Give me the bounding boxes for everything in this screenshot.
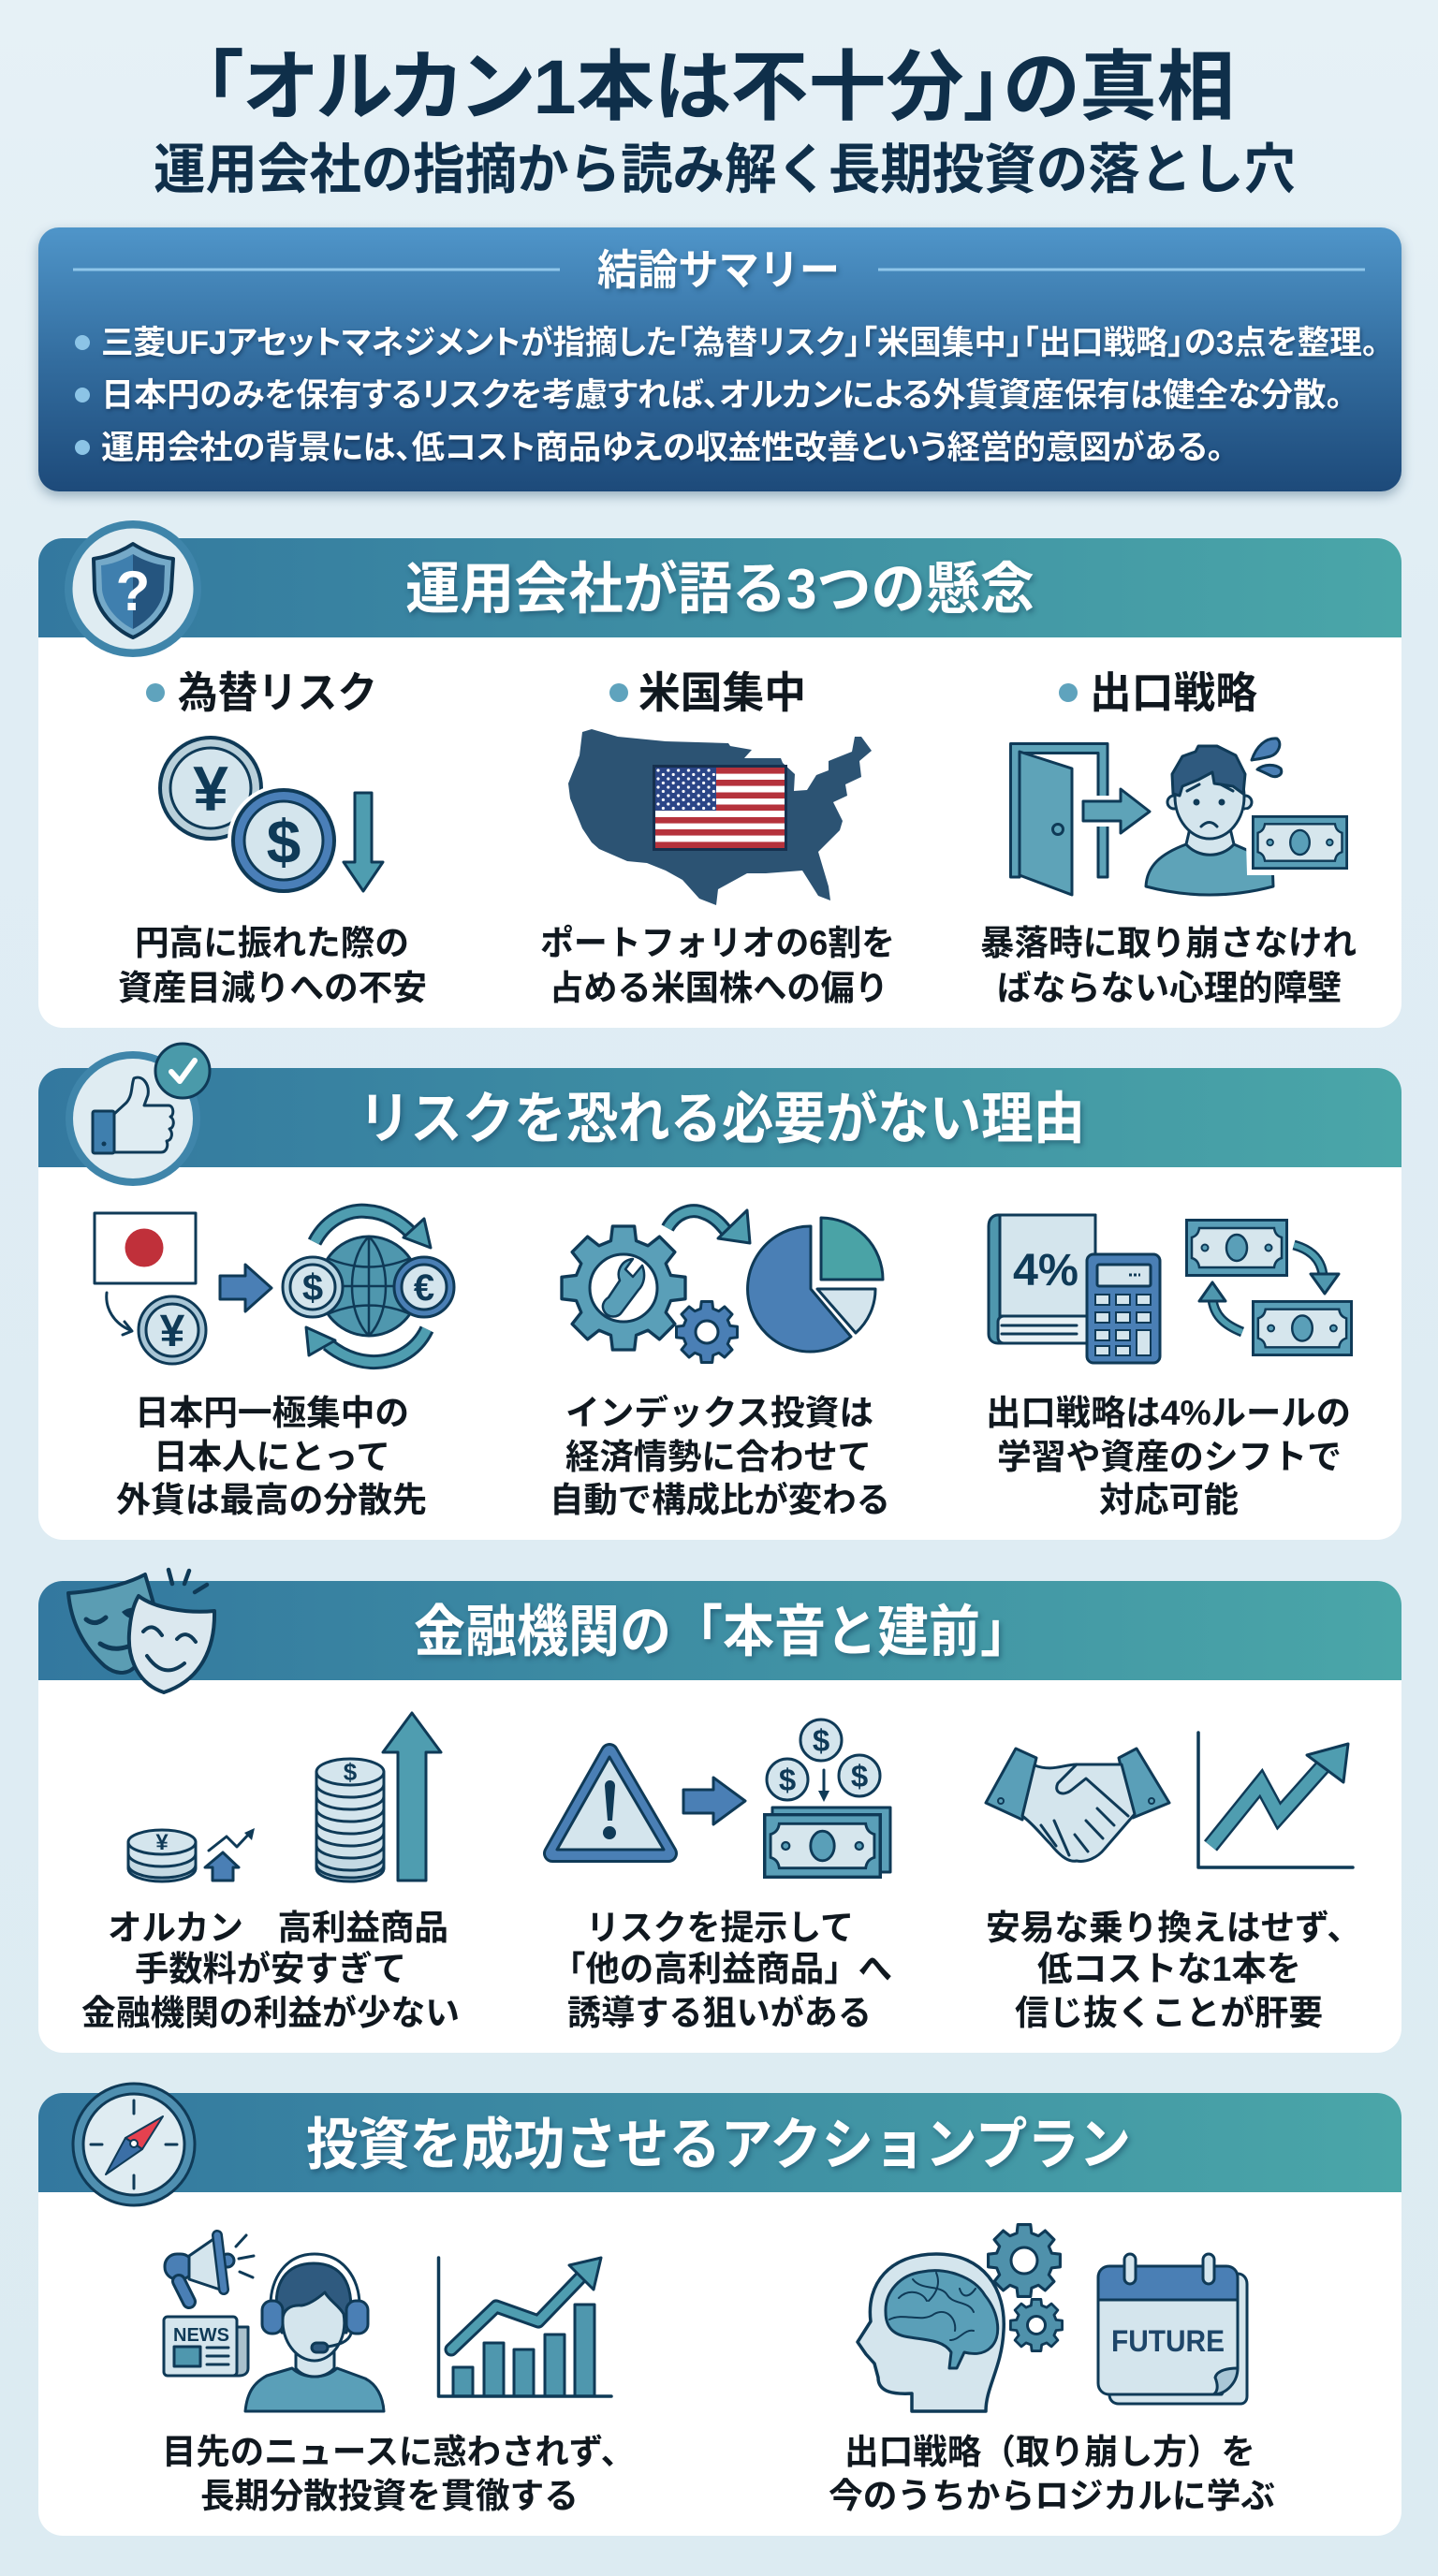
text: stay with low cost fund: 信じ抜くことが肝要 — [1015, 1994, 1323, 2032]
icon: small coin stack vs tall stack: ¥ — [155, 1830, 169, 1855]
panel: action plan — [38, 2084, 1401, 2536]
icon: megaphone, news and person with headset: NEWS — [173, 2325, 229, 2346]
text: yen concentration: 日本人にとって — [154, 1438, 390, 1476]
icon: warning triangle, arrow, bills and coins: $ — [813, 1723, 829, 1758]
text: steering to other products: 誘導する狙いがある — [567, 1994, 872, 2032]
text: index investing: 自動で構成比が変わる — [550, 1481, 890, 1519]
text: stay the course: 長期分散投資を貫徹する — [200, 2477, 579, 2515]
icon: 4% book, calculator and bills — [989, 1215, 1352, 1363]
text: stay with low cost fund — [986, 1909, 1361, 2032]
icon: shield badge — [65, 520, 201, 657]
icon: FUTURE calendar: FUTURE — [1111, 2324, 1225, 2358]
text: steering to other products: 「他の高利益商品」へ — [551, 1950, 892, 1988]
text: yen concentration: 日本円一極集中の — [135, 1394, 409, 1432]
icon: warning triangle, arrow, bills and coins: $ — [851, 1759, 868, 1793]
icon: FUTURE calendar — [1098, 2254, 1247, 2404]
icon: door, arrow and worried person with bill — [1011, 739, 1351, 895]
title: 「オルカン1本は不十分」の真相 — [204, 45, 1235, 130]
icon: compass badge — [73, 2084, 195, 2205]
text: index investing: 経済情勢に合わせて — [565, 1438, 872, 1476]
icon: handshake and rising chart — [986, 1733, 1353, 1867]
text: stay with low cost fund: 低コストな1本を — [1037, 1950, 1301, 1988]
icon: yen and dollar coins with down arrow — [160, 738, 383, 897]
heading: three concerns: 運用会社が語る3つの懸念 — [405, 558, 1034, 621]
column heading: exit strategy: 出口戦略 — [1090, 668, 1257, 717]
text: learn exit strategy: 出口戦略（取り崩し方）を — [844, 2433, 1255, 2471]
icon: warning triangle, arrow, bills and coins: $ — [779, 1763, 796, 1797]
text: index investing: インデックス投資は — [565, 1393, 873, 1432]
icon: small coin stack vs tall stack: $ — [344, 1758, 358, 1786]
text: yen concentration — [116, 1394, 427, 1519]
icon: yen and dollar coins with down arrow: $ — [267, 807, 301, 876]
summary item 1: 三菱UFJアセットマネジメントが指摘した「為替リスク」「米国集中」「出口戦略」の3点を整理。 — [101, 325, 1378, 361]
icon: gears and pie chart — [562, 1210, 883, 1363]
text: 4% rule — [986, 1394, 1351, 1519]
summary item 2: 日本円のみを保有するリスクを考慮すれば、オルカンによる外貨資産保有は健全な分散。 — [101, 377, 1343, 414]
icon: theater masks — [68, 1570, 214, 1692]
panel: three concerns — [38, 520, 1401, 1028]
text: learn exit strategy — [829, 2433, 1275, 2515]
panel: summary — [38, 227, 1401, 491]
text: US concentration: ポートフォリオの6割を — [540, 924, 895, 962]
icon: shield badge: ? — [116, 560, 150, 622]
text: yen concentration: 外貨は最高の分散先 — [116, 1481, 427, 1519]
text: US concentration: 占める米国株への偏り — [550, 969, 888, 1007]
text: steering to other products: リスクを提示して — [586, 1909, 854, 1947]
icon: 4% book, calculator and bills: 4% — [1013, 1246, 1078, 1295]
text: 4% rule: 対応可能 — [1099, 1481, 1239, 1519]
text: low fees: オルカン 高利益商品 — [108, 1909, 448, 1947]
text: exit strategy: 暴落時に取り崩さなけれ — [980, 924, 1357, 962]
icon: megaphone, news and person with headset — [164, 2235, 384, 2411]
icon: yen and dollar coins with down arrow: ¥ — [193, 754, 228, 825]
text: stay the course: 目先のニュースに惑わされず、 — [162, 2433, 635, 2471]
heading: true intentions: 金融機関の「本音と建前」 — [414, 1601, 1032, 1663]
icon: Japan flag to foreign currency globe — [95, 1211, 454, 1364]
icon: Japan flag to foreign currency globe: ¥ — [160, 1307, 185, 1356]
summary item 3: 運用会社の背景には、低コスト商品ゆえの収益性改善という経営的意図がある。 — [101, 430, 1224, 466]
panel: no need to fear — [38, 1044, 1401, 1540]
column heading: US concentration: 米国集中 — [638, 668, 806, 717]
subtitle: 運用会社の指摘から読み解く長期投資の落とし穴 — [154, 139, 1296, 200]
text: US concentration — [540, 924, 895, 1007]
panel: true intentions — [38, 1570, 1401, 2053]
column heading: currency risk: 為替リスク — [178, 668, 377, 717]
icon: small coin stack vs tall stack — [128, 1713, 441, 1881]
text: 4% rule: 学習や資産のシフトで — [997, 1438, 1342, 1476]
icon: Japan flag to foreign currency globe: $ — [302, 1267, 323, 1309]
text: index investing — [550, 1393, 890, 1519]
icon: thumbs up badge — [66, 1044, 210, 1186]
heading: action plan: 投資を成功させるアクションプラン — [306, 2114, 1131, 2176]
icon: warning triangle, arrow, bills and coins — [552, 1720, 890, 1877]
icon: Japan flag to foreign currency globe: € — [414, 1267, 434, 1309]
text: stay with low cost fund: 安易な乗り換えはせず、 — [986, 1909, 1361, 1947]
text: low fees: 金融機関の利益が少ない — [81, 1994, 460, 2032]
text: currency risk: 資産目減りへの不安 — [118, 969, 427, 1007]
text: learn exit strategy: 今のうちからロジカルに学ぶ — [829, 2477, 1275, 2515]
text: low fees: 手数料が安すぎて — [135, 1950, 406, 1988]
icon: bar chart with rising arrow — [438, 2258, 611, 2396]
text: stay the course — [162, 2433, 635, 2515]
icon: brain head with gears — [858, 2225, 1063, 2411]
icon: US map with flag — [568, 729, 872, 905]
heading: no need to fear: リスクを恐れる必要がない理由 — [359, 1088, 1085, 1150]
text: 4% rule: 出口戦略は4%ルールの — [986, 1394, 1351, 1432]
text: steering to other products — [551, 1909, 892, 2032]
text: exit strategy: ばならない心理的障壁 — [997, 969, 1342, 1007]
text: currency risk — [118, 924, 427, 1007]
text: currency risk: 円高に振れた際の — [135, 924, 409, 962]
text: exit strategy — [980, 924, 1357, 1007]
summary heading: 結論サマリー — [597, 246, 840, 294]
text: low fees — [81, 1909, 460, 2032]
